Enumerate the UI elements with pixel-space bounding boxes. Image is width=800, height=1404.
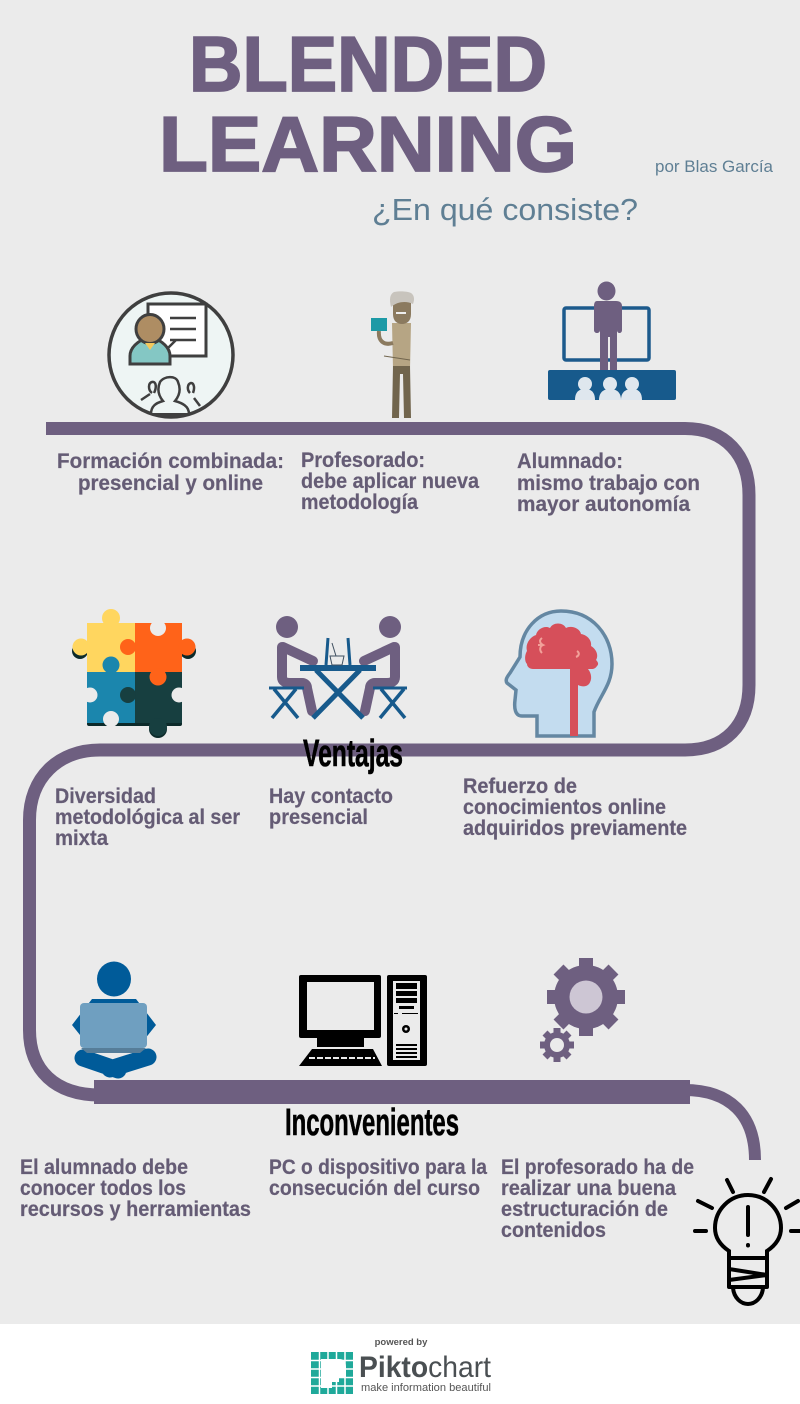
text: contacto presencial: presencial: [269, 806, 368, 829]
footer: piktochart logo: Piktochart: [359, 1351, 492, 1384]
winding path: [30, 428, 755, 1160]
text: diversidad metodologica: mixta: [55, 827, 108, 850]
text: alumnado: mismo trabajo con: [517, 472, 700, 495]
title: [159, 20, 577, 188]
text: contacto presencial: Hay contacto: [269, 785, 393, 808]
text: pc o dispositivo: consecución del curso: [269, 1177, 480, 1200]
footer band: [0, 1324, 800, 1404]
icon: two people at a table: [269, 616, 407, 718]
text: alumnado: mayor autonomía: [517, 493, 690, 516]
text: profesorado: metodología: [301, 491, 418, 514]
text: alumno recursos: El alumnado debe: [20, 1156, 188, 1179]
text: profesorado estructuracion: estructuración de: [501, 1198, 668, 1221]
text: profesorado estructuracion: El profesorado ha de: [501, 1156, 694, 1179]
icon: person with laptop: [72, 962, 156, 1070]
icon: desktop computer: [299, 975, 427, 1066]
text: alumno recursos: conocer todos los: [20, 1177, 186, 1200]
icon: head with brain: [506, 611, 612, 736]
text: pc o dispositivo: [269, 1156, 487, 1200]
icon: light bulb: [695, 1179, 800, 1304]
title: LEARNING: [159, 100, 577, 188]
text: formacion combinada: [57, 450, 284, 495]
text: refuerzo online: Refuerzo de: [463, 775, 577, 798]
text: formacion combinada: Formación combinada:: [57, 450, 284, 473]
footer: piktochart logo: make information beautiful: [361, 1382, 491, 1394]
text: refuerzo online: conocimientos online: [463, 796, 666, 819]
icon: puzzle: [72, 609, 196, 738]
text: pc o dispositivo: PC o dispositivo para la: [269, 1156, 487, 1179]
text: profesorado: Profesorado:: [301, 449, 425, 472]
icon: teacher and students in circle: [109, 293, 233, 418]
text: profesorado estructuracion: realizar una buena: [501, 1177, 676, 1200]
icon: gears: [540, 958, 625, 1062]
piktochart mark: [311, 1352, 353, 1394]
text: diversidad metodologica: metodológica al ser: [55, 806, 240, 829]
footer: piktochart logo: [311, 1337, 492, 1394]
text: alumno recursos: [20, 1156, 251, 1221]
title: BLENDED: [189, 20, 547, 108]
text: alumnado: Alumnado:: [517, 450, 623, 473]
text: profesorado: debe aplicar nueva: [301, 470, 479, 493]
text: profesorado estructuracion: contenidos: [501, 1219, 606, 1242]
heading: ventajas: Ventajas: [303, 733, 403, 775]
text: diversidad metodologica: Diversidad: [55, 785, 156, 808]
heading: inconvenientes: Inconvenientes: [285, 1102, 459, 1144]
footer: piktochart logo: powered by: [375, 1337, 428, 1348]
text: profesorado estructuracion: [501, 1156, 694, 1242]
text: alumnado: [517, 450, 700, 516]
subtitle: ¿En qué consiste?: [372, 192, 638, 227]
icon: presenter on stage with audience: [548, 282, 676, 400]
text: contacto presencial: [269, 785, 393, 829]
text: profesorado: [301, 449, 479, 514]
author credit: por Blas García: [655, 157, 774, 176]
text: diversidad metodologica: [55, 785, 240, 850]
text: refuerzo online: [463, 775, 687, 840]
text: refuerzo online: adquiridos previamente: [463, 817, 687, 840]
text: alumno recursos: recursos y herramientas: [20, 1198, 251, 1221]
icon: teacher figure holding tablet: [371, 291, 414, 418]
text: formacion combinada: presencial y online: [78, 472, 263, 495]
